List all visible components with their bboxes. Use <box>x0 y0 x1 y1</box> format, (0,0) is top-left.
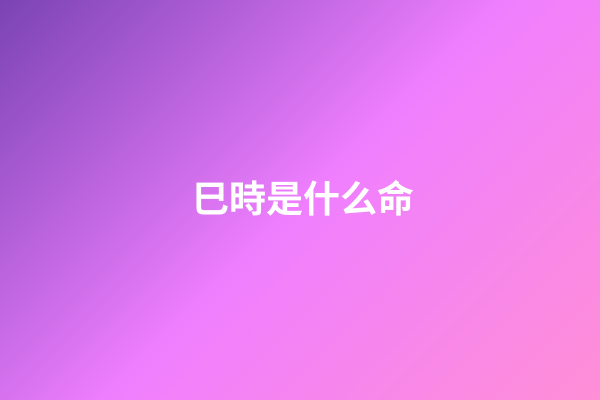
title: 巳時是什么命 <box>192 179 414 220</box>
